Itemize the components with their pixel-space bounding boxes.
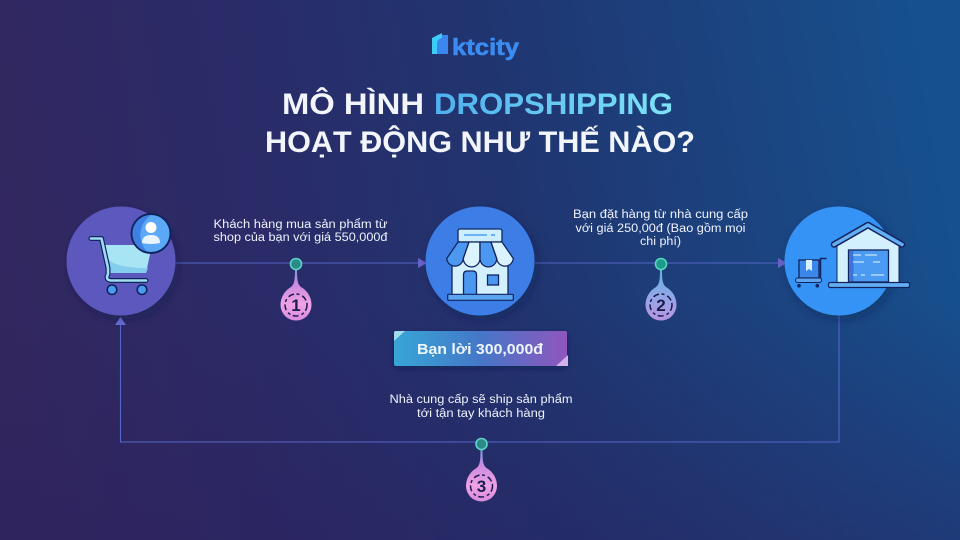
shop wall — [452, 258, 508, 295]
shop base — [448, 294, 513, 300]
text: step 2 description: Bạn đặt hàng từ nhà cung cấp — [573, 209, 748, 221]
icon: shop circle — [426, 206, 534, 316]
shop awning — [447, 242, 513, 267]
text: step 3 description: tới tận tay khách hàng — [417, 408, 545, 420]
text: step 1 description: Khách hàng mua sản phẩm từ — [214, 219, 388, 231]
title line 1 — [282, 87, 673, 121]
text: step 1 description: shop của bạn với giá 550,000đ — [214, 232, 388, 244]
marker: step 3: 3 — [477, 477, 486, 496]
text: step 2 description: với giá 250,00đ (Bao gồm mọi — [576, 223, 746, 235]
user badge — [132, 214, 170, 253]
marker: step 3 — [466, 438, 497, 501]
text: step 3 description: Nhà cung cấp sẽ ship sản phẩm — [390, 394, 572, 406]
cart with box — [796, 258, 826, 288]
warehouse roof — [834, 225, 902, 244]
title line 2: HOẠT ĐỘNG NHƯ THẾ NÀO? — [265, 125, 695, 159]
logo: ktcity: ktcity — [452, 34, 519, 60]
icon: shopping cart circle — [66, 206, 176, 316]
cart basket — [105, 245, 152, 273]
marker: step 2: 2 — [656, 296, 666, 315]
logo: ktcity — [432, 33, 519, 60]
connector: supplier back to customer — [115, 314, 839, 442]
text: step 2 description: chi phí) — [640, 236, 681, 248]
warehouse building — [837, 227, 899, 283]
title line 1: MÔ HÌNH — [282, 87, 424, 121]
connector: shop to supplier — [535, 258, 787, 268]
text: step 1 description — [214, 219, 388, 244]
icon: warehouse circle — [784, 206, 910, 316]
title line 1: DROPSHIPPING — [434, 88, 673, 121]
marker: step 1: 1 — [291, 296, 301, 315]
connector: customer to shop — [175, 258, 427, 268]
text: step 2 description — [573, 209, 748, 248]
warehouse door — [848, 250, 888, 282]
marker: step 2 — [646, 258, 676, 320]
cart frame — [91, 238, 146, 280]
profit badge: Bạn lời 300,000đ — [417, 341, 544, 358]
text: step 3 description — [390, 394, 572, 420]
warehouse floor — [828, 282, 910, 288]
title — [265, 87, 695, 159]
shop window — [488, 275, 498, 285]
shop door — [464, 271, 476, 295]
shop sign — [458, 229, 502, 242]
marker: step 1 — [280, 258, 312, 320]
profit badge — [394, 331, 568, 366]
